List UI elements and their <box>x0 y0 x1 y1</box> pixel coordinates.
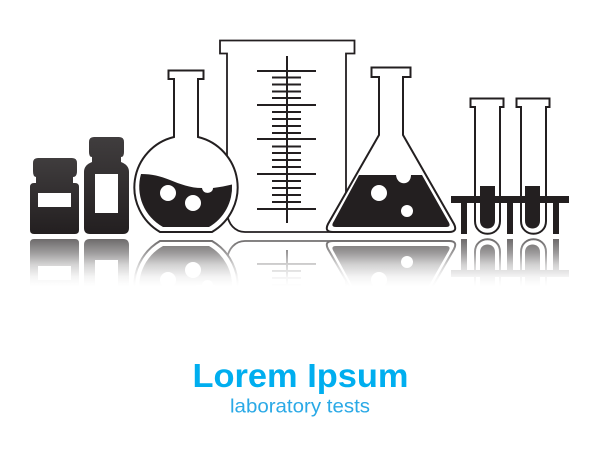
conical flask liquid <box>332 175 450 227</box>
beaker scale <box>257 56 316 223</box>
lab glassware set <box>30 40 569 234</box>
subtitle: laboratory tests <box>230 396 370 418</box>
test tube 1 <box>470 98 504 234</box>
test tube rack <box>451 98 569 234</box>
title: Lorem Ipsum <box>192 357 408 394</box>
flask liquid <box>139 174 232 227</box>
mirrored reflection <box>30 238 569 279</box>
conical flask <box>327 68 455 232</box>
round flask <box>134 70 238 232</box>
test tube 2 <box>516 98 550 234</box>
beaker <box>220 40 354 232</box>
bottle: small <box>30 158 79 234</box>
infographic canvas <box>30 40 569 416</box>
bottle: tall <box>84 137 129 234</box>
